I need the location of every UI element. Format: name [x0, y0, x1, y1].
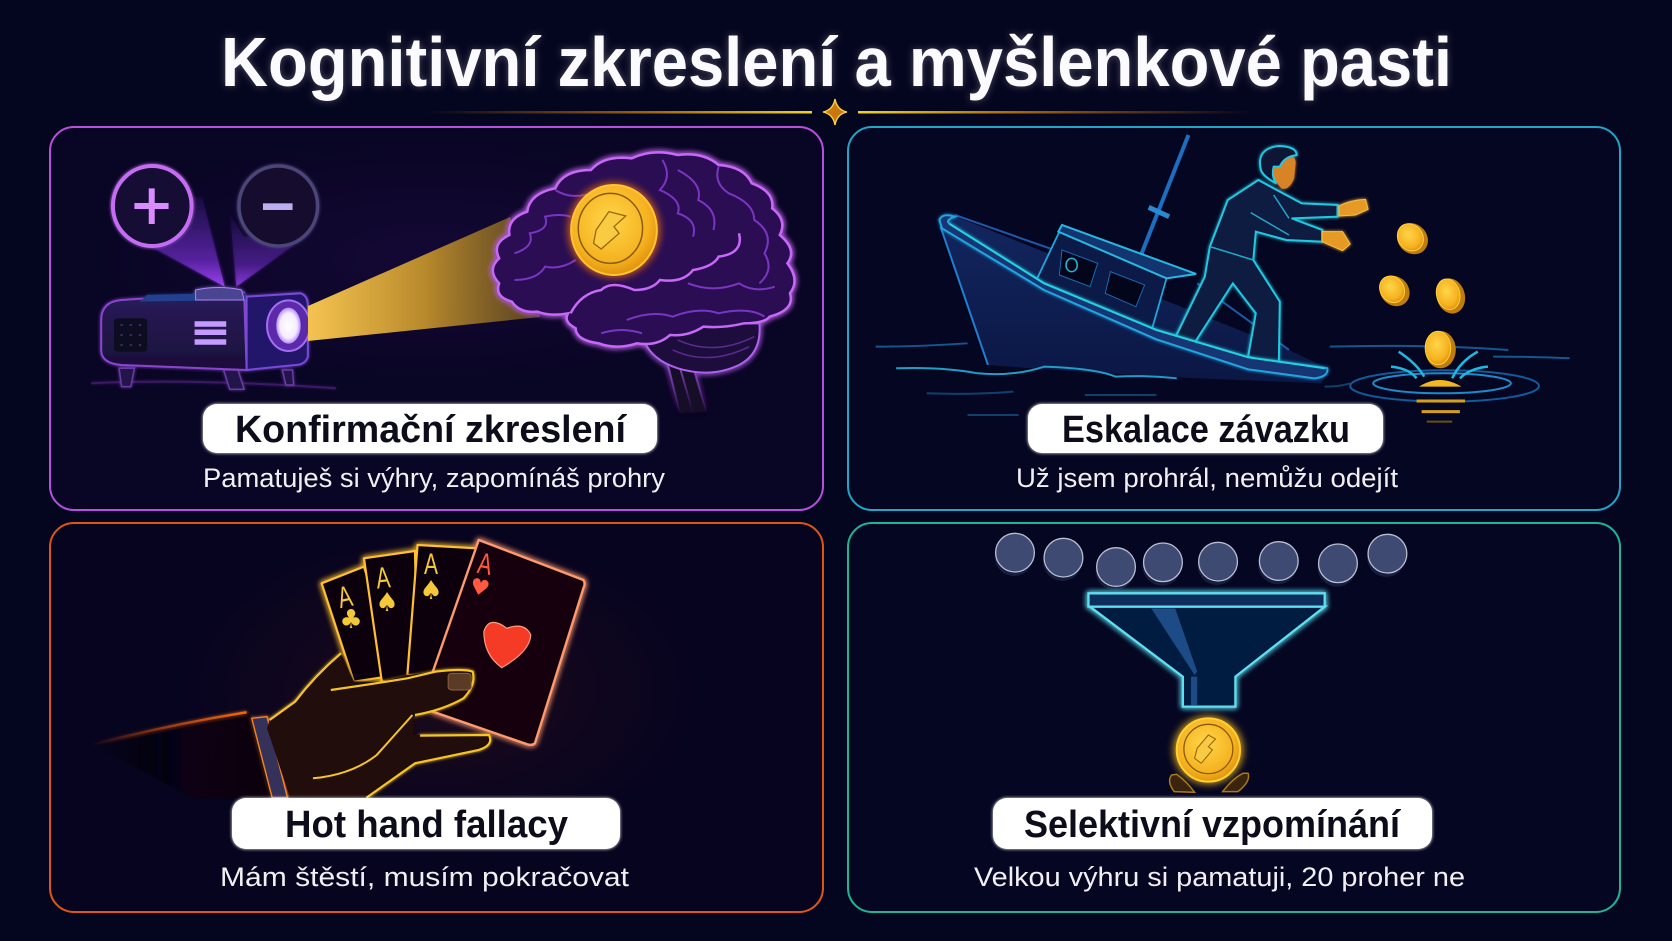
label pill: Konfirmační zkreslení [235, 409, 627, 451]
card letters and suits: ♣ [339, 605, 363, 635]
label pill: Selektivní vzpomínání [1024, 804, 1401, 846]
gold light beam [308, 217, 540, 341]
icon: fan of cards [322, 540, 585, 745]
card letters and suits: A [374, 561, 392, 596]
icon: row of grey coins [995, 533, 1407, 590]
card letters and suits: A [475, 547, 495, 582]
card letters and suits [335, 547, 495, 635]
card letters and suits: ♠ [375, 588, 399, 618]
water lines [876, 343, 1570, 415]
coin in brain [568, 183, 660, 277]
icon: plus and minus projected circles [113, 166, 318, 287]
boat near rim [939, 215, 1327, 378]
label pill [232, 798, 620, 849]
label pill: Hot hand fallacy [285, 804, 568, 846]
description: Už jsem prohrál, nemůžu odejít [1016, 463, 1399, 493]
card letters and suits: ♥ [467, 574, 492, 603]
icon: brain with coin [493, 152, 795, 413]
title: Kognitivní zkreslení a myšlenkové pasti [221, 23, 1452, 101]
card letters and suits: A [424, 548, 438, 581]
icon: waves [896, 367, 1177, 378]
panel: Hot hand fallacy [50, 523, 823, 912]
icon: hand [91, 653, 490, 798]
icon: sinking boat [941, 135, 1327, 383]
card letters and suits: A [335, 580, 355, 615]
label pill: Eskalace závazku [1062, 409, 1350, 451]
icon: falling coins and splash [1350, 222, 1539, 422]
description: Pamatuješ si výhry, zapomínáš prohry [203, 463, 665, 493]
description: Mám štěstí, musím pokračovat [220, 862, 630, 892]
panel: Selektivní vzpomínání [848, 523, 1620, 912]
panel: Konfirmační zkreslení [50, 127, 823, 510]
icon: selected gold coin [1170, 716, 1249, 792]
icon: projector [91, 287, 336, 389]
icon: funnel [1088, 593, 1325, 707]
title divider with star [424, 99, 1253, 125]
icon: man throwing coins [1174, 146, 1368, 365]
panel: Eskalace závazku [848, 127, 1620, 510]
card letters and suits: ♠ [419, 576, 443, 606]
description: Velkou výhru si pamatuji, 20 proher ne [974, 862, 1465, 892]
